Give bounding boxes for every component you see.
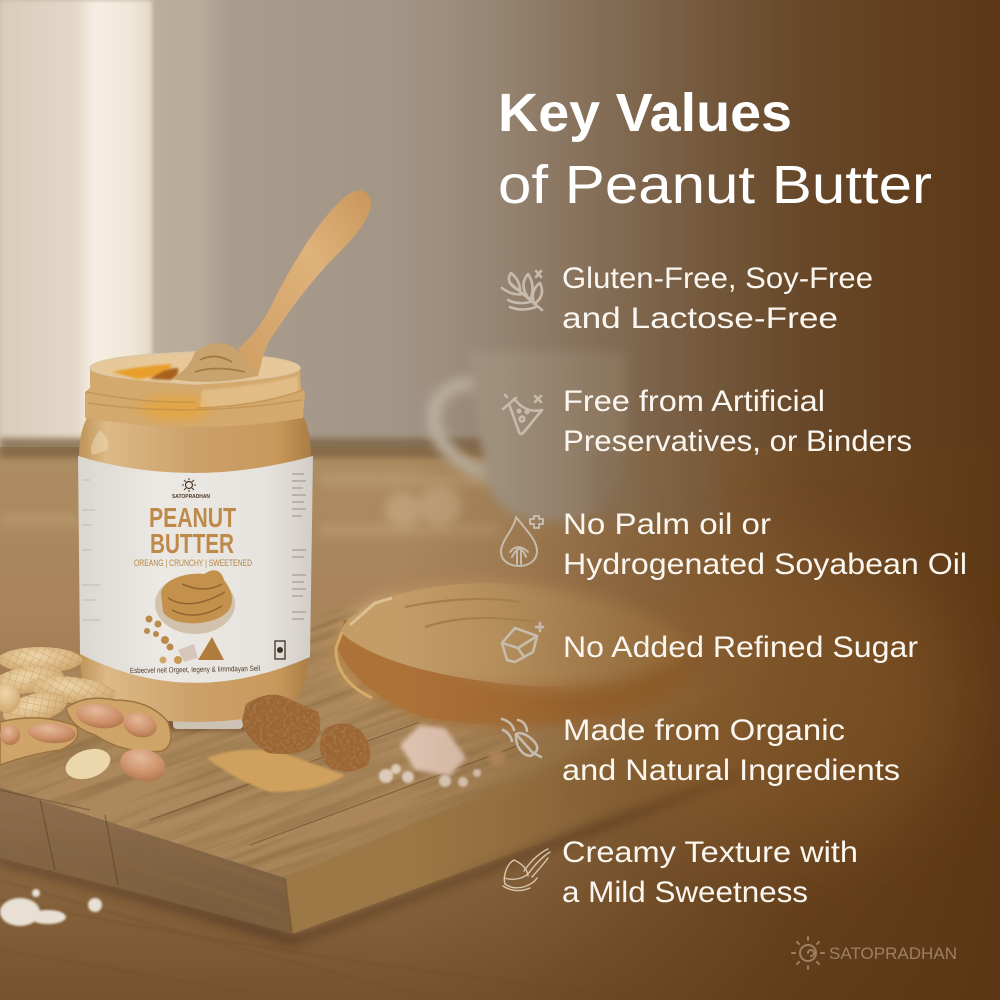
title line 2: of Peanut Butter <box>498 155 932 215</box>
blurred coffee mug and peanuts behind <box>385 352 720 528</box>
text <box>563 508 967 581</box>
text <box>562 836 858 909</box>
background: wooden table <box>0 438 1000 1000</box>
label title: PEANUT <box>149 502 236 533</box>
text <box>562 714 900 787</box>
text: and Lactose-Free <box>562 302 838 335</box>
label logo <box>172 478 210 500</box>
warm glow on right side <box>620 550 960 850</box>
item: organic <box>502 714 900 787</box>
label subtitle: OREANG | CRUNCHY | SWEETENED <box>134 558 252 569</box>
label bottom text: Esbecvel neit Orgeet, Iegeny & Iimmdayan Sell <box>130 664 260 675</box>
label <box>78 456 313 683</box>
text: and Natural Ingredients <box>562 754 900 787</box>
icon: sugar cube <box>502 623 543 662</box>
label logo: SATOPRADHAN <box>172 494 210 500</box>
himalayan salt <box>379 725 505 787</box>
item: no palm oil <box>501 508 967 581</box>
veg mark <box>275 641 285 659</box>
open pod left <box>0 718 78 765</box>
peanuts in shells, left cluster <box>0 647 171 786</box>
text: a Mild Sweetness <box>562 876 808 909</box>
logo sun icon <box>792 937 824 969</box>
text <box>563 385 912 458</box>
icon: cream swirl on spoon <box>503 849 550 891</box>
board grain <box>0 608 518 878</box>
text: Preservatives, or Binders <box>563 425 912 458</box>
text: Creamy Texture with <box>562 836 858 869</box>
sea salt on table <box>0 889 102 926</box>
skinless half peanut <box>62 744 114 784</box>
text <box>562 262 873 335</box>
jar body <box>79 416 311 722</box>
item: no preservatives <box>503 385 912 458</box>
text: Made from Organic <box>563 714 845 747</box>
jaggery chunks and powder <box>207 695 370 792</box>
text: Hydrogenated Soyabean Oil <box>563 548 967 581</box>
key values list <box>501 262 967 909</box>
icon: leaf <box>502 719 541 757</box>
cutting board <box>0 608 712 939</box>
label side text <box>82 474 306 620</box>
brand logo <box>792 937 957 969</box>
label title: BUTTER <box>150 528 234 559</box>
open pod with two peanuts <box>66 698 171 752</box>
item: creamy texture <box>503 836 858 909</box>
red-skin peanut <box>117 744 169 786</box>
text: No Palm oil or <box>563 508 771 541</box>
label bowl illustration <box>144 570 235 664</box>
toast with peanut butter <box>336 583 692 726</box>
peanut butter jar <box>78 190 371 731</box>
text: No Added Refined Sugar <box>563 631 918 664</box>
background: wall and curtain <box>0 0 1000 470</box>
dark brown overlay behind the text <box>400 0 1000 1000</box>
label title <box>149 502 236 559</box>
text: Free from Artificial <box>563 385 825 418</box>
icon: oil drop with palm <box>501 516 543 566</box>
item: no refined sugar <box>502 623 918 664</box>
icon: wheat <box>502 271 542 310</box>
title line 1: Key Values <box>498 83 792 143</box>
title <box>498 83 932 215</box>
jar glass neck and rim <box>85 352 305 427</box>
peanut butter scoop <box>172 343 258 382</box>
icon: flask <box>503 395 542 434</box>
text: Gluten-Free, Soy-Free <box>562 262 873 295</box>
item: gluten-free <box>502 262 873 335</box>
logo wordmark: SATOPRADHAN <box>829 944 957 963</box>
wooden spoon <box>238 190 371 376</box>
whole peanuts <box>0 647 117 730</box>
